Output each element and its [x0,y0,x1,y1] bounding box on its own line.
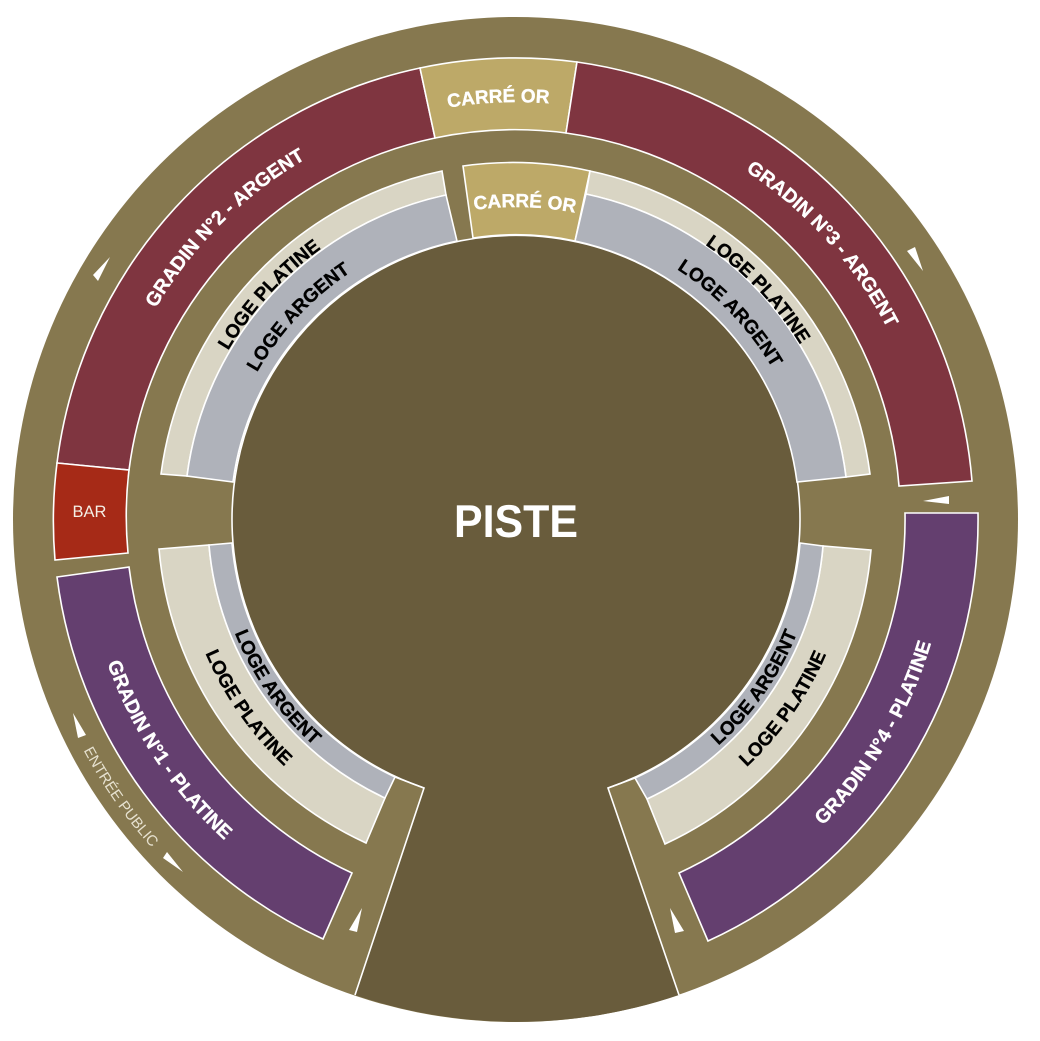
heading: piste: PISTE [454,495,578,547]
panel: gradin 3 argent [565,61,973,487]
panel: carré or, outer [419,57,578,139]
arrow: lower left top [73,713,86,738]
arrow: upper right [907,247,923,271]
panel: gradin 2 argent [56,67,436,471]
label: carré or outer: CARRÉ OR [448,85,549,107]
arrow: corridor right [670,908,684,933]
panel: carré or, inner [462,162,591,240]
piste: central ring and entrance corridor [232,235,800,1022]
label: gradin 2: GRADIN N°2 - ARGENT [146,147,302,306]
panel: loges lower right [634,542,872,846]
label: loge argent lower left: LOGE ARGENT [235,628,323,743]
panel: bar [53,463,129,560]
icon: direction arrows [73,247,949,933]
arrow: corridor left [349,908,362,932]
label: carré or inner: CARRÉ OR [474,190,576,213]
label: loge platine upper right: LOGE PLATINE [706,234,811,344]
panel: loges upper right [574,170,871,483]
label: loge argent upper left: LOGE ARGENT [246,261,348,372]
panel: loges upper left [160,170,458,483]
label: entrée public: ENTRÉE PUBLIC [84,746,158,846]
label: loge platine lower left: LOGE PLATINE [206,648,293,766]
label: gradin 3: GRADIN N°3 - ARGENT [748,162,900,324]
label: bar: BAR [73,503,107,521]
arrow: right [923,496,949,504]
panel: loges lower left [158,542,396,844]
panel: gradin 4 platine [678,512,979,942]
label: loge argent upper right: LOGE ARGENT [678,258,784,364]
panel: gradin 1 platine [56,566,353,940]
label: loge platine upper left: LOGE PLATINE [217,238,321,350]
label: gradin 4: GRADIN N°4 - PLATINE [816,640,932,823]
arrow: lower left bottom [163,852,183,872]
arrow: upper left [93,257,110,281]
label: loge platine lower right: LOGE PLATINE [738,650,826,766]
label: gradin 1: GRADIN N°1 - PLATINE [108,660,233,840]
label: loge argent lower right: LOGE ARGENT [710,628,796,745]
